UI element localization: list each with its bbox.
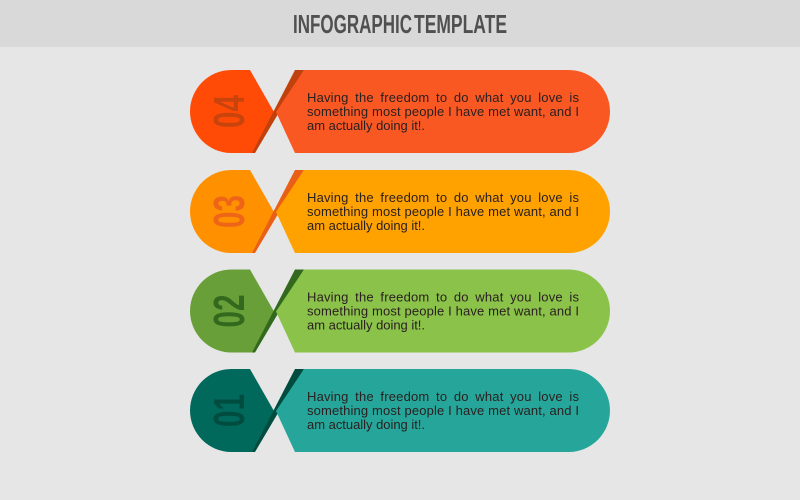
number tab 03	[190, 170, 274, 253]
diagonal stripe	[252, 70, 304, 153]
description: am actually doing it!.	[307, 218, 425, 233]
row 04: orange	[190, 70, 610, 153]
number 03: 03	[205, 195, 254, 228]
description: am actually doing it!.	[307, 118, 425, 133]
text pill	[276, 170, 610, 253]
description: something most people I have met want, and I	[307, 204, 579, 219]
diagonal stripe	[252, 270, 304, 352]
number 02: 02	[205, 294, 254, 328]
row 03: amber	[190, 170, 610, 253]
text pill	[276, 270, 610, 352]
description: am actually doing it!.	[307, 318, 425, 332]
description	[307, 290, 580, 332]
number tab 01	[190, 369, 274, 452]
description: Having the freedom to do what you love is	[307, 389, 580, 404]
title: INFOGRAPHIC	[293, 9, 412, 39]
diagonal stripe	[252, 170, 304, 253]
description: Having the freedom to do what you love is	[307, 90, 580, 105]
row 02: green	[190, 270, 610, 352]
number tab 02	[190, 270, 274, 352]
title: TEMPLATE	[414, 9, 507, 39]
description: Having the freedom to do what you love is	[307, 190, 580, 205]
description	[307, 190, 580, 233]
number 04: 04	[205, 95, 254, 128]
header band	[0, 0, 800, 47]
row 01: teal	[190, 369, 610, 452]
description: am actually doing it!.	[307, 417, 425, 432]
diagonal stripe	[252, 369, 304, 452]
description: something most people I have met want, and I	[307, 104, 579, 119]
number 01: 01	[205, 394, 254, 427]
number tab 04	[190, 70, 274, 153]
description	[307, 389, 580, 432]
description: something most people I have met want, and I	[307, 403, 579, 418]
description: Having the freedom to do what you love is	[307, 290, 580, 304]
text pill	[276, 369, 610, 452]
description: something most people I have met want, and I	[307, 304, 579, 318]
description	[307, 90, 580, 133]
text pill	[276, 70, 610, 153]
